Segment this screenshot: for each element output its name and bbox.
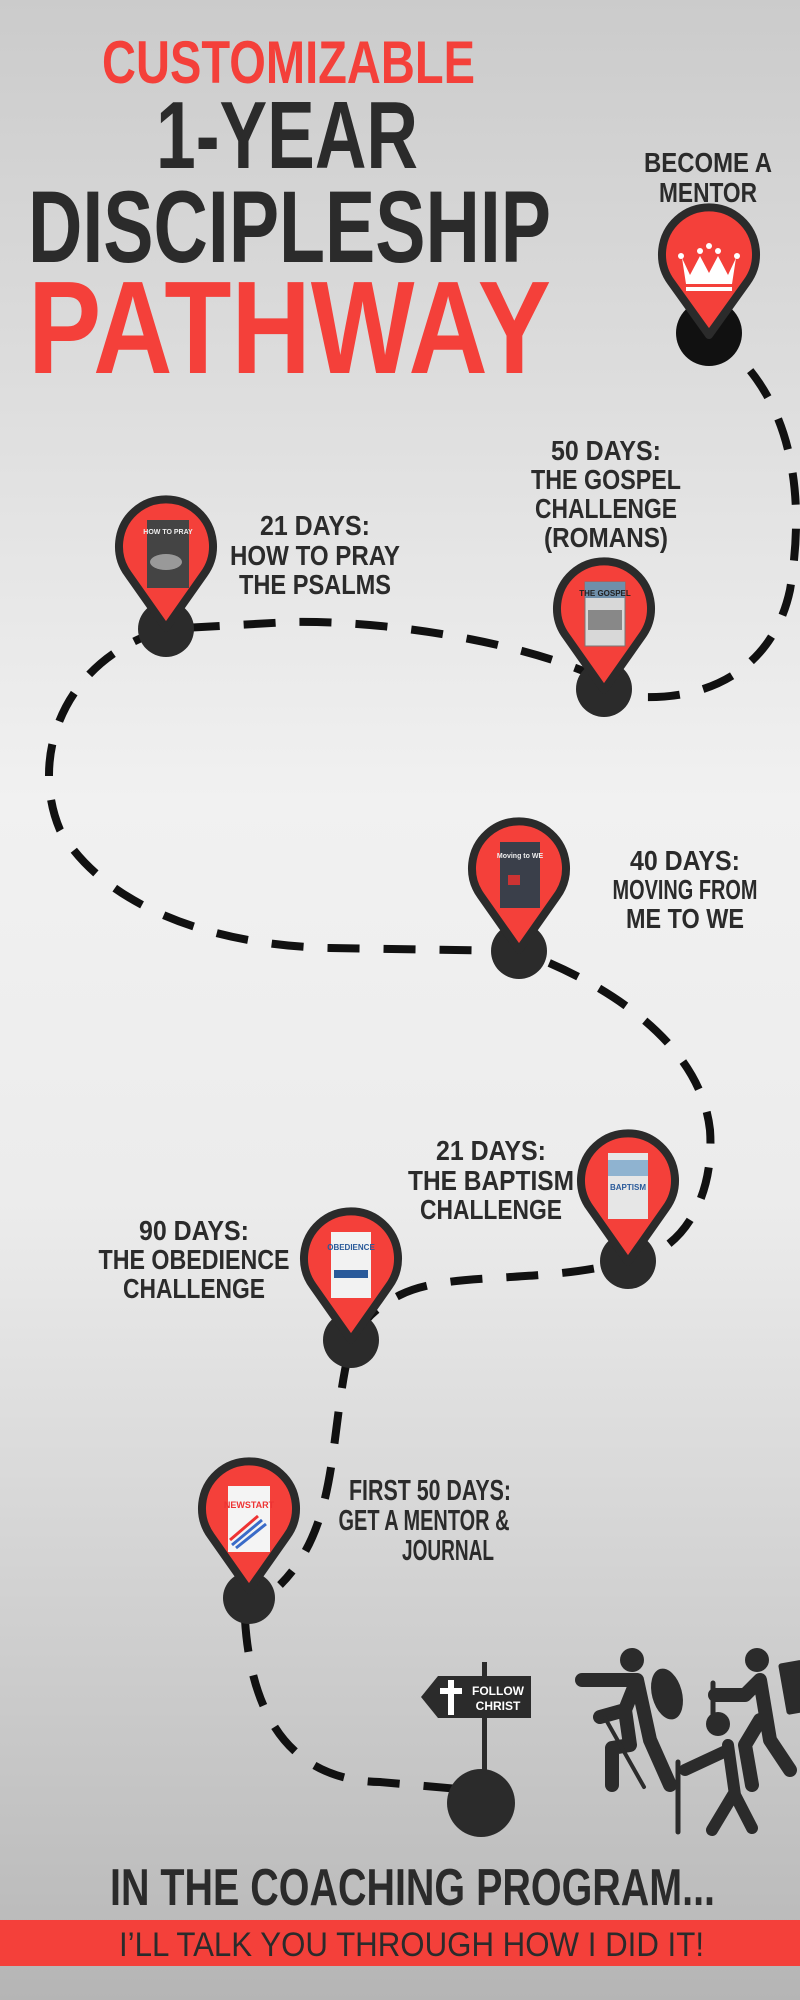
book cover	[143, 520, 193, 588]
label: become a mentor: BECOME A	[644, 147, 772, 178]
label: 40 days	[612, 845, 758, 934]
pin: first 50 days newstart	[202, 1461, 296, 1624]
title: PATHWAY	[28, 254, 551, 401]
label: 50 days gospel: 50 DAYS:	[551, 435, 661, 466]
end point and signpost: FOLLOW	[472, 1684, 525, 1698]
label: 21 days psalms: 21 DAYS:	[260, 510, 370, 541]
label: baptism	[408, 1135, 574, 1225]
label: become a mentor: MENTOR	[659, 177, 757, 208]
book cover: HOW TO PRAY	[143, 529, 193, 536]
label: 40 days: 40 DAYS:	[630, 845, 740, 876]
book cover: OBEDIENCE	[327, 1243, 375, 1252]
label: first 50 days: FIRST 50 DAYS:	[349, 1475, 511, 1507]
title: CUSTOMIZABLE	[102, 29, 475, 96]
label: 50 days gospel: THE GOSPEL	[531, 464, 681, 495]
label: 50 days gospel: CHALLENGE	[535, 493, 677, 524]
label: baptism: THE BAPTISM	[408, 1165, 574, 1196]
label: 50 days gospel: (ROMANS)	[544, 522, 668, 553]
book cover: Moving to WE	[497, 853, 543, 860]
label: first 50 days: GET A MENTOR &	[338, 1505, 510, 1537]
label: 21 days psalms: HOW TO PRAY	[230, 540, 400, 571]
title: DISCIPLESHIP	[28, 170, 551, 284]
title: 1-YEAR	[156, 82, 418, 189]
label: first 50 days	[338, 1475, 511, 1567]
label: baptism: CHALLENGE	[420, 1194, 562, 1225]
book cover	[497, 842, 543, 908]
pin: 21 days baptism	[581, 1133, 675, 1289]
title	[28, 29, 551, 401]
pin: 40 days me to we	[472, 821, 566, 979]
book cover: BAPTISM	[610, 1183, 646, 1192]
label: obedience: CHALLENGE	[123, 1273, 265, 1304]
pin: 21 days psalms	[119, 499, 213, 657]
icon: crown	[678, 243, 740, 291]
label: 40 days: ME TO WE	[626, 903, 744, 934]
label: obedience: THE OBEDIENCE	[98, 1244, 290, 1275]
end point and signpost	[421, 1662, 531, 1837]
end point and signpost: CHRIST	[476, 1699, 521, 1713]
pin: 50 days gospel	[557, 561, 651, 717]
book cover: THE GOSPEL	[579, 589, 631, 598]
label: become a mentor	[644, 147, 772, 208]
book cover	[608, 1153, 648, 1219]
sign: follow christ	[421, 1676, 531, 1718]
label: 50 days gospel	[531, 435, 681, 553]
book cover	[224, 1486, 275, 1552]
icon: hikers	[582, 1648, 800, 1832]
label: 21 days psalms	[230, 510, 400, 600]
book cover: NEWSTART	[224, 1500, 275, 1510]
banner: talk you through: I’LL TALK YOU THROUGH HOW I DID IT!	[119, 1926, 704, 1964]
label: obedience: 90 DAYS:	[139, 1215, 249, 1246]
label: first 50 days: JOURNAL	[402, 1535, 494, 1567]
banner: talk you through	[0, 1920, 800, 1966]
pin: 90 days obedience	[304, 1211, 398, 1368]
label: baptism: 21 DAYS:	[436, 1135, 546, 1166]
dashed pathway	[49, 333, 796, 1790]
label: 21 days psalms: THE PSALMS	[239, 569, 391, 600]
book cover	[327, 1232, 375, 1298]
label: obedience	[98, 1215, 290, 1304]
book cover	[579, 582, 631, 646]
pin: become a mentor (crown)	[662, 207, 756, 366]
